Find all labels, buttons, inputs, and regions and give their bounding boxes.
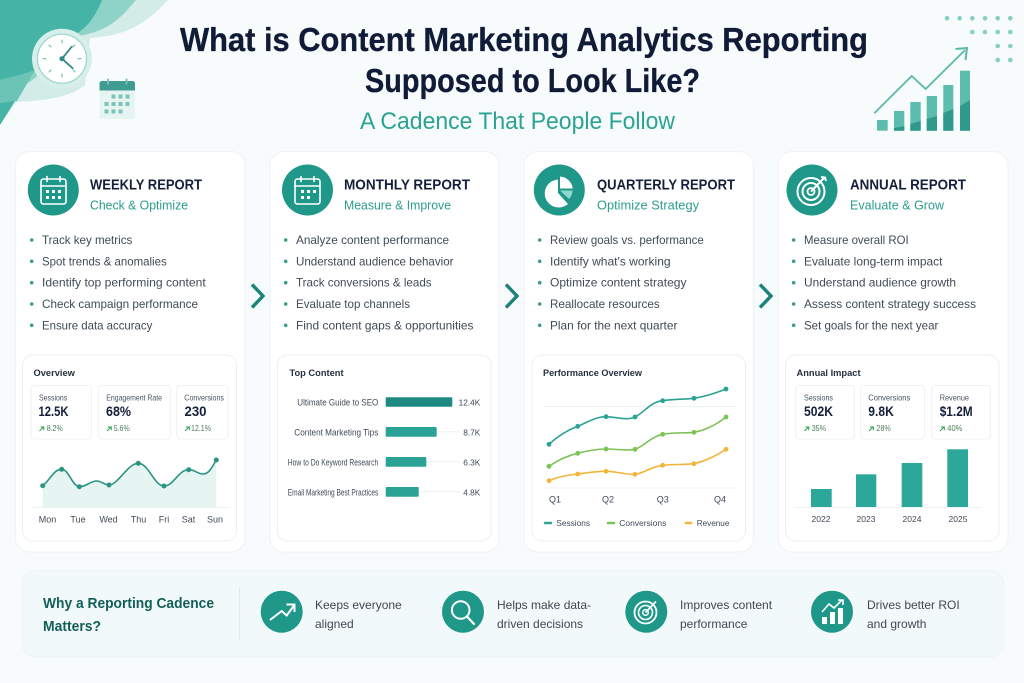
panel: annual impact bbox=[786, 355, 999, 541]
stat: annual sessions bbox=[796, 386, 854, 439]
arrow: weekly to monthly bbox=[252, 284, 263, 308]
divider bbox=[238, 587, 240, 640]
chart: top content bars: 8.7K bbox=[463, 427, 481, 437]
heading: why cadence matters: Matters? bbox=[43, 619, 101, 635]
arrow: quarterly to annual bbox=[760, 284, 771, 308]
panel: quarterly report bbox=[524, 152, 754, 552]
title: What is Content Marketing Analytics Reporting bbox=[180, 21, 868, 58]
chart: daily line: Wed bbox=[99, 514, 118, 524]
stat: annual conversions bbox=[861, 386, 925, 439]
chart: daily line bbox=[32, 458, 228, 524]
heading: why cadence matters: Why a Reporting Cadence bbox=[43, 596, 214, 612]
checklist: monthly: Understand audience behavior bbox=[296, 255, 454, 268]
chart: performance lines bbox=[543, 387, 736, 504]
stat: conversions: Conversions bbox=[184, 392, 224, 402]
benefit: drives better ROI and growth: Drives better ROI bbox=[867, 598, 960, 612]
stat: conversions: 12.1% bbox=[191, 423, 211, 433]
checklist: monthly: Track conversions & leads bbox=[296, 277, 432, 290]
chart: daily line: Tue bbox=[70, 514, 86, 524]
checklist: quarterly: Optimize content strategy bbox=[550, 277, 687, 290]
stat: annual conversions: Conversions bbox=[868, 392, 910, 402]
benefit: keeps everyone aligned bbox=[261, 591, 402, 633]
stat: engagement rate: Engagement Rate bbox=[106, 392, 162, 402]
decoration: top-left teal waves bbox=[0, 0, 168, 125]
benefit: data-driven decisions: driven decisions bbox=[497, 617, 583, 631]
panel: overview bbox=[22, 355, 236, 541]
stat: annual revenue bbox=[932, 386, 990, 439]
icon: monthly calendar bbox=[282, 164, 333, 216]
stat: sessions: Sessions bbox=[39, 392, 67, 402]
checklist: monthly bbox=[284, 234, 474, 332]
stat: conversions: 230 bbox=[184, 404, 206, 419]
chart: top content bars: How to Do Keyword Research bbox=[288, 457, 378, 467]
heading: why cadence matters bbox=[43, 596, 214, 635]
chart: top content bars: 6.3K bbox=[463, 457, 481, 467]
stat: sessions: 12.5K bbox=[38, 404, 69, 419]
decoration: growth chart with arrow bbox=[874, 16, 1013, 131]
panel: weekly report bbox=[16, 152, 245, 552]
checklist: weekly: Ensure data accuracy bbox=[42, 319, 152, 332]
stat: annual revenue: Revenue bbox=[940, 392, 969, 402]
checklist: weekly: Spot trends & anomalies bbox=[42, 255, 167, 268]
checklist: weekly: Identify top performing content bbox=[42, 277, 206, 290]
tagline: annual: Evaluate & Grow bbox=[850, 198, 945, 212]
chart: top content bars: Content Marketing Tips bbox=[294, 427, 379, 437]
arrow: monthly to quarterly bbox=[506, 284, 517, 308]
chart: performance lines: Q4 bbox=[714, 494, 726, 504]
checklist: annual bbox=[792, 234, 976, 332]
legend: performance: Sessions bbox=[556, 518, 590, 528]
heading: top content: Top Content bbox=[290, 368, 344, 378]
heading: overview: Overview bbox=[34, 368, 76, 378]
chart: performance lines: Q1 bbox=[549, 494, 561, 504]
checklist: annual: Assess content strategy success bbox=[804, 298, 976, 311]
heading: annual impact: Annual Impact bbox=[796, 368, 861, 378]
benefit: improves content performance: performance bbox=[680, 617, 748, 631]
tagline: monthly: Measure & Improve bbox=[344, 198, 451, 212]
checklist: monthly: Find content gaps & opportunities bbox=[296, 319, 474, 332]
benefit: data-driven decisions bbox=[442, 591, 591, 633]
legend: performance: Revenue bbox=[697, 518, 730, 528]
chart: daily line: Sat bbox=[182, 514, 196, 524]
chart: top content bars: 12.4K bbox=[459, 397, 481, 407]
checklist: annual: Evaluate long-term impact bbox=[804, 255, 943, 268]
icon: target bbox=[786, 164, 838, 216]
stat: annual sessions: Sessions bbox=[804, 392, 833, 402]
heading: weekly: WEEKLY REPORT bbox=[90, 176, 202, 194]
stat: annual conversions: 9.8K bbox=[868, 404, 894, 419]
checklist: quarterly: Reallocate resources bbox=[550, 298, 660, 311]
stat: engagement rate bbox=[98, 386, 171, 439]
checklist: weekly: Track key metrics bbox=[42, 234, 132, 247]
chart: top content bars bbox=[288, 397, 481, 497]
panel: top content bbox=[278, 355, 491, 541]
subtitle: A Cadence That People Follow bbox=[360, 108, 676, 135]
stat: engagement rate: 68% bbox=[106, 404, 131, 419]
chart: annual bars: 2022 bbox=[812, 514, 831, 524]
heading: performance overview: Performance Overview bbox=[543, 368, 643, 378]
tagline: quarterly: Optimize Strategy bbox=[597, 198, 700, 212]
checklist: quarterly: Identify what's working bbox=[550, 255, 671, 268]
title bbox=[180, 21, 868, 99]
legend: performance bbox=[545, 518, 730, 528]
chart: performance lines: Q3 bbox=[657, 494, 669, 504]
stat: annual revenue: 40% bbox=[947, 423, 963, 433]
checklist: annual: Understand audience growth bbox=[804, 277, 956, 290]
icon: calendar bbox=[100, 78, 135, 119]
tagline: weekly: Check & Optimize bbox=[90, 198, 188, 212]
icon: clock bbox=[32, 29, 92, 89]
stat: engagement rate: 5.6% bbox=[114, 423, 130, 433]
chart: annual bars bbox=[796, 449, 981, 524]
icon: weekly calendar bbox=[28, 164, 79, 216]
chart: annual bars: 2023 bbox=[857, 514, 876, 524]
checklist: quarterly: Review goals vs. performance bbox=[550, 234, 704, 247]
checklist: weekly: Check campaign performance bbox=[42, 298, 198, 311]
chart: daily line: Fri bbox=[159, 514, 169, 524]
heading: annual: ANNUAL REPORT bbox=[850, 176, 966, 194]
stat: sessions: 8.2% bbox=[47, 423, 63, 433]
stat: annual sessions: 502K bbox=[804, 404, 833, 419]
chart: top content bars: 4.8K bbox=[463, 487, 481, 497]
benefit: drives better ROI and growth bbox=[811, 591, 960, 633]
stat: sessions bbox=[31, 386, 91, 439]
chart: annual bars: 2024 bbox=[903, 514, 922, 524]
benefit: improves content performance bbox=[625, 591, 773, 633]
benefit: improves content performance: Improves content bbox=[680, 598, 773, 612]
stat: annual sessions: 35% bbox=[812, 423, 826, 433]
heading: quarterly: QUARTERLY REPORT bbox=[597, 176, 735, 194]
checklist: monthly: Analyze content performance bbox=[296, 234, 449, 247]
icon: pie chart bbox=[534, 164, 585, 216]
legend: performance: Conversions bbox=[619, 518, 666, 528]
chart: top content bars: Ultimate Guide to SEO bbox=[297, 397, 378, 407]
benefit: data-driven decisions: Helps make data- bbox=[497, 598, 591, 612]
chart: daily line: Sun bbox=[207, 514, 223, 524]
checklist: monthly: Evaluate top channels bbox=[296, 298, 410, 311]
checklist: weekly bbox=[30, 234, 206, 332]
chart: performance lines: Q2 bbox=[602, 494, 614, 504]
benefit: drives better ROI and growth: and growth bbox=[867, 617, 926, 631]
chart: daily line: Mon bbox=[39, 514, 56, 524]
checklist: annual: Measure overall ROI bbox=[804, 234, 909, 247]
panel: why a reporting cadence matters bbox=[22, 570, 1004, 657]
stat: annual revenue: $1.2M bbox=[940, 404, 973, 419]
stat: annual conversions: 28% bbox=[876, 423, 891, 433]
panel: performance overview bbox=[532, 355, 746, 541]
checklist: annual: Set goals for the next year bbox=[804, 319, 938, 332]
title: Supposed to Look Like? bbox=[365, 62, 700, 99]
panel: annual report bbox=[778, 152, 1008, 552]
heading: monthly: MONTHLY REPORT bbox=[344, 176, 470, 194]
benefit: keeps everyone aligned: Keeps everyone bbox=[315, 598, 402, 612]
benefit: keeps everyone aligned: aligned bbox=[315, 617, 354, 631]
chart: daily line: Thu bbox=[131, 514, 146, 524]
checklist: quarterly bbox=[538, 234, 704, 332]
checklist: quarterly: Plan for the next quarter bbox=[550, 319, 678, 332]
chart: top content bars: Email Marketing Best Practices bbox=[288, 487, 379, 497]
stat: conversions bbox=[177, 386, 228, 439]
chart: annual bars: 2025 bbox=[949, 514, 968, 524]
panel: monthly report bbox=[270, 152, 499, 552]
